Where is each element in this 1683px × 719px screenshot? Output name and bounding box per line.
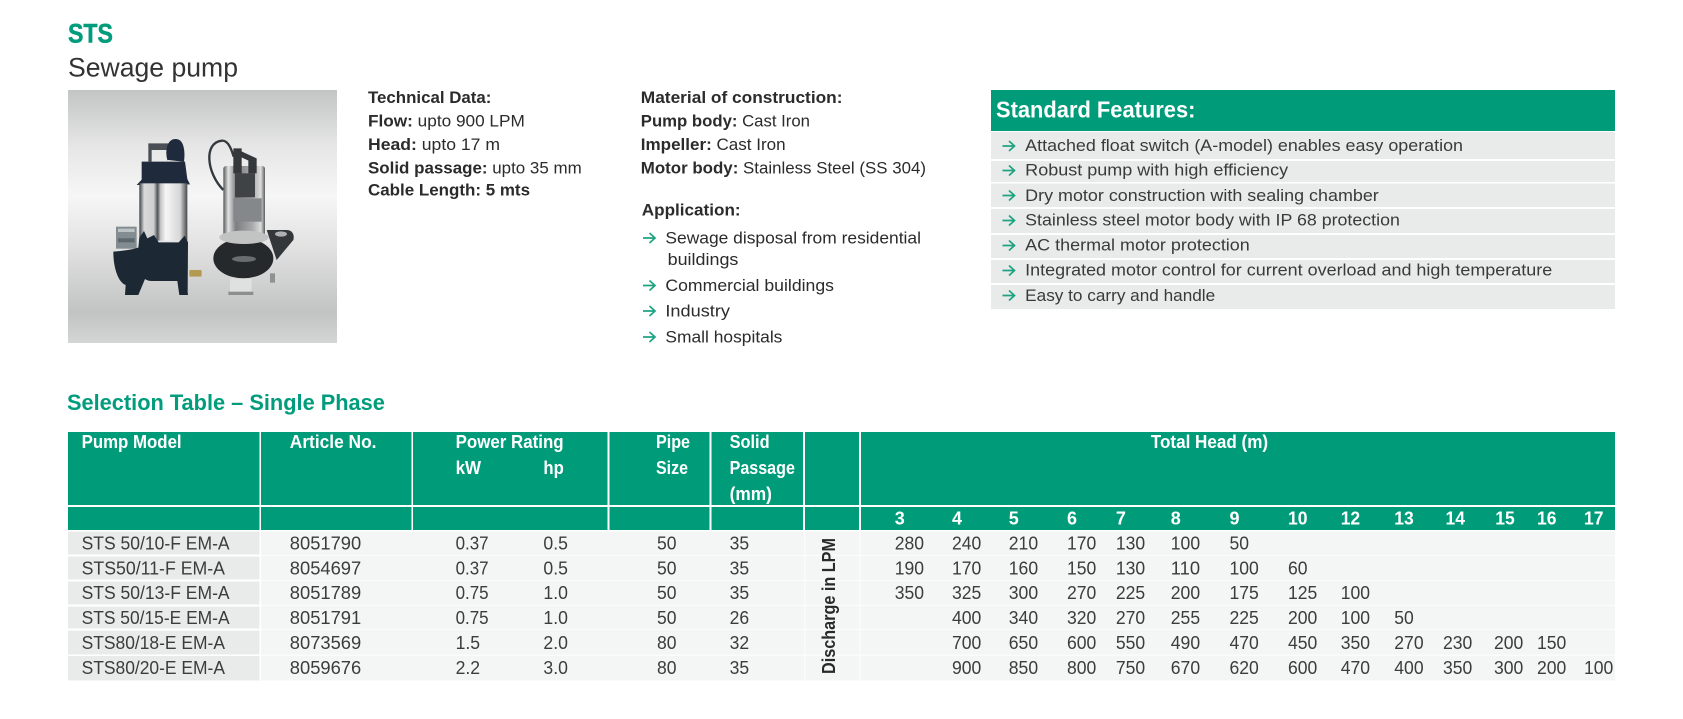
table row 1: 50 (657, 534, 676, 554)
table row 5: 650 (1009, 633, 1038, 653)
icon: left pump (113, 140, 202, 295)
table row 3: 325 (952, 583, 981, 603)
product photo: two sewage pumps (68, 90, 337, 343)
table row 2: 190 (895, 558, 924, 578)
table row 2: 0.37 (456, 558, 489, 578)
table row 1: 170 (1067, 534, 1096, 554)
rotated label: discharge in LPM: Discharge in LPM (819, 538, 839, 674)
table row 6: 3.0 (543, 658, 568, 678)
table row 6: 600 (1288, 658, 1317, 678)
table row 4: 50 (1394, 608, 1414, 628)
table row 3: 35 (730, 583, 749, 603)
application list: Small hospitals (665, 328, 782, 346)
table row 6: 620 (1230, 658, 1259, 678)
head column numbers: 14 (1446, 508, 1465, 528)
head column numbers: 15 (1495, 508, 1515, 528)
text block: technical data: Solid passage: upto 35 mm (368, 159, 582, 177)
table header labels: Article No. (290, 432, 376, 452)
text block: technical data: Cable Length: 5 mts (368, 182, 530, 200)
table row 6: 100 (1584, 658, 1613, 678)
table row 6: 350 (1443, 658, 1472, 678)
text block: technical data (368, 89, 582, 200)
table header labels: Solid (730, 432, 770, 452)
head column numbers: 7 (1116, 508, 1126, 528)
application list: buildings (668, 251, 738, 269)
head column numbers: 13 (1394, 508, 1414, 528)
table row 4: 270 (1116, 608, 1145, 628)
table row 6: 400 (1394, 658, 1424, 678)
table row 3: 1.0 (543, 583, 568, 603)
application list: Commercial buildings (665, 277, 834, 295)
table row 6: 670 (1171, 658, 1200, 678)
text block: material of construction (641, 89, 926, 177)
table row 1: 0.37 (456, 534, 489, 554)
table row 6: 900 (952, 658, 981, 678)
table row 5: 550 (1116, 633, 1145, 653)
table row 2: STS50/11-F EM-A (82, 558, 225, 578)
table row 1: 280 (895, 534, 924, 554)
table row 5: 200 (1494, 633, 1523, 653)
feature list: Attached float switch (A-model) enables easy operation (1025, 136, 1463, 155)
subtitle: Sewage pump: Sewage pump (68, 53, 238, 83)
table row 4 (82, 608, 1414, 628)
table row 4: 1.0 (543, 608, 568, 628)
table row 5 (82, 633, 1566, 653)
table row 2 (82, 558, 1308, 578)
table row 1 (82, 534, 1249, 554)
head column numbers: 9 (1230, 508, 1240, 528)
table row 1: STS 50/10-F EM-A (82, 534, 230, 554)
text block: application (642, 202, 921, 346)
table row 2: 35 (730, 558, 749, 578)
table row 4: 320 (1067, 608, 1096, 628)
table row 3: 350 (895, 583, 924, 603)
table row 5: 450 (1288, 633, 1317, 653)
table header labels (82, 432, 1268, 504)
table row 5: 700 (952, 633, 981, 653)
table header labels: Passage (730, 458, 795, 478)
table row 3: 200 (1171, 583, 1200, 603)
table row 2: 0.5 (543, 558, 568, 578)
feature list: AC thermal motor protection (1025, 236, 1250, 255)
table row 3: 8051789 (290, 583, 361, 603)
table row 4: 225 (1230, 608, 1259, 628)
head column numbers: 3 (895, 508, 905, 528)
table row 6: 750 (1116, 658, 1145, 678)
table row 2: 60 (1288, 558, 1308, 578)
table row 3 (82, 583, 1370, 603)
application list: Industry (665, 303, 731, 321)
table row 5: 150 (1537, 633, 1566, 653)
table row 2: 110 (1171, 558, 1200, 578)
table body background (68, 532, 1615, 680)
table header labels: Pipe (656, 432, 690, 452)
table row 3: 175 (1230, 583, 1259, 603)
table row 1: 8051790 (290, 534, 361, 554)
table header labels: Pump Model (82, 432, 182, 452)
table row 3: STS 50/13-F EM-A (82, 583, 230, 603)
feature list: Robust pump with high efficiency (1025, 161, 1289, 180)
table row 5: 350 (1341, 633, 1370, 653)
table row 4: 340 (1009, 608, 1038, 628)
table row 2: 160 (1009, 558, 1038, 578)
table header labels: (mm) (730, 484, 772, 504)
table row 3: 0.75 (456, 583, 489, 603)
head column numbers: 5 (1009, 508, 1019, 528)
table row 5: 8073569 (290, 633, 361, 653)
feature list (1025, 136, 1552, 305)
head column numbers: 6 (1067, 508, 1077, 528)
table row 5: 230 (1443, 633, 1472, 653)
text block: material of construction: Motor body: Stainless Steel (SS 304) (641, 159, 926, 177)
table row 6: 35 (730, 658, 749, 678)
icon: right pump (209, 141, 294, 295)
table row 5: 490 (1171, 633, 1200, 653)
table row 5: 600 (1067, 633, 1096, 653)
arrow bullets (643, 233, 656, 342)
text block: material of construction: Pump body: Cast Iron (641, 113, 810, 131)
table row 3: 50 (657, 583, 676, 603)
selection table (68, 432, 1615, 680)
table row 3: 300 (1009, 583, 1038, 603)
head column numbers: 12 (1341, 508, 1360, 528)
head column numbers: 17 (1584, 508, 1604, 528)
table row 1: 240 (952, 534, 981, 554)
table row 2: 50 (657, 558, 676, 578)
table row 5: 80 (657, 633, 676, 653)
table row 4: 100 (1341, 608, 1370, 628)
table row 6: STS80/20-E EM-A (82, 658, 225, 678)
feature list: Integrated motor control for current overload and high temperature (1025, 261, 1552, 280)
feature list: Easy to carry and handle (1025, 286, 1215, 305)
table row 6: 8059676 (290, 658, 361, 678)
table row 1: 50 (1230, 534, 1249, 554)
feature list: Dry motor construction with sealing chamber (1025, 186, 1379, 205)
table row 1: 130 (1116, 534, 1145, 554)
table header labels: kW (456, 458, 481, 478)
table row 5: 2.0 (543, 633, 568, 653)
panel header bar (991, 90, 1615, 131)
table row 4: 400 (952, 608, 981, 628)
heading: selection table: Selection Table – Single Phase (67, 390, 385, 415)
table row 5: 470 (1230, 633, 1259, 653)
heading: application: Application: (642, 202, 741, 220)
table row 4: 50 (657, 608, 676, 628)
table header cells (68, 432, 1615, 530)
table row 1: 35 (730, 534, 749, 554)
feature row backgrounds (991, 132, 1615, 309)
table row 4: 26 (730, 608, 749, 628)
feature list: Stainless steel motor body with IP 68 protection (1025, 211, 1400, 230)
panel heading: Standard Features: (996, 97, 1195, 123)
table row 1: 0.5 (543, 534, 568, 554)
table row 6: 850 (1009, 658, 1038, 678)
table row 6: 470 (1341, 658, 1370, 678)
text block: material of construction: Impeller: Cast Iron (641, 136, 786, 154)
table row 4: 0.75 (456, 608, 489, 628)
table row 4: 255 (1171, 608, 1200, 628)
text block: technical data: Flow: upto 900 LPM (368, 113, 525, 131)
table row 6: 200 (1537, 658, 1566, 678)
table header labels: Power Rating (456, 432, 564, 452)
table row 6: 800 (1067, 658, 1096, 678)
table row 4: STS 50/15-E EM-A (82, 608, 230, 628)
table row 6: 80 (657, 658, 676, 678)
table row 3: 225 (1116, 583, 1145, 603)
table row 2: 150 (1067, 558, 1096, 578)
table row 5: 1.5 (456, 633, 480, 653)
text block: technical data: Technical Data: (368, 89, 491, 107)
application list (665, 230, 921, 346)
head column numbers (895, 508, 1604, 528)
head column numbers: 10 (1288, 508, 1308, 528)
table row 3: 100 (1341, 583, 1370, 603)
table row 6: 2.2 (456, 658, 480, 678)
table row 5: STS80/18-E EM-A (82, 633, 225, 653)
head column numbers: 16 (1537, 508, 1556, 528)
table row 3: 270 (1067, 583, 1096, 603)
table row 1: 100 (1171, 534, 1200, 554)
text block: material of construction: Material of construction: (641, 89, 842, 107)
feature arrows (1002, 141, 1014, 300)
table row 4: 200 (1288, 608, 1317, 628)
table header labels: Total Head (m) (1151, 432, 1268, 452)
head column numbers: 8 (1171, 508, 1181, 528)
table row 4: 8051791 (290, 608, 361, 628)
table row 1: 210 (1009, 534, 1038, 554)
table row 5: 270 (1394, 633, 1424, 653)
table row 2: 130 (1116, 558, 1145, 578)
table row 6: 300 (1494, 658, 1523, 678)
head column numbers: 4 (952, 508, 962, 528)
table row 3: 125 (1288, 583, 1317, 603)
table header labels: hp (543, 458, 564, 478)
table row 6 (82, 658, 1613, 678)
application list: Sewage disposal from residential (665, 230, 921, 248)
title: STS: STS (68, 18, 113, 48)
text block: technical data: Head: upto 17 m (368, 136, 500, 154)
table header labels: Size (656, 458, 688, 478)
table row 2: 8054697 (290, 558, 361, 578)
table row 2: 100 (1230, 558, 1259, 578)
panel: standard features (991, 90, 1615, 309)
table row 5: 32 (730, 633, 749, 653)
table row 2: 170 (952, 558, 981, 578)
